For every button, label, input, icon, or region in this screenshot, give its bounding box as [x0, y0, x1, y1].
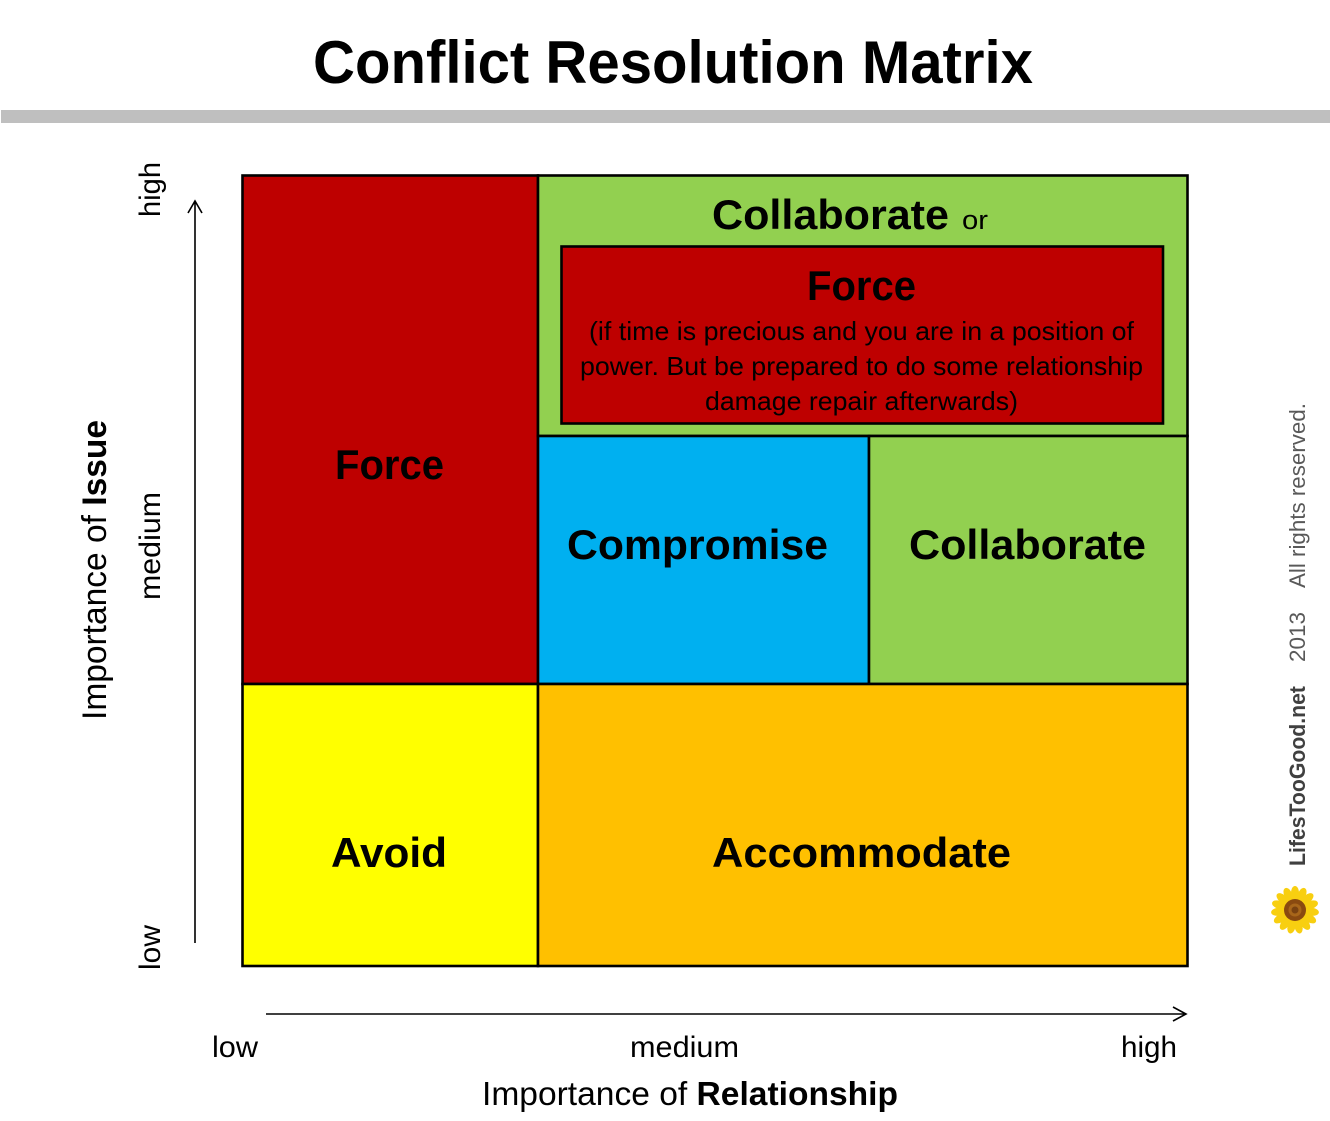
y axis tick: high: high	[134, 162, 167, 217]
inner panel: force with condition	[562, 246, 1163, 424]
y axis tick: low: low	[134, 925, 167, 970]
title rule	[1, 110, 1330, 123]
cell: collaborate or force	[538, 176, 1188, 436]
inner panel: force with condition: damage repair afterwards)	[705, 386, 1018, 416]
inner panel: force with condition: power. But be prepared to do some relationship	[580, 351, 1143, 381]
cell: collaborate or force: Collaborate	[712, 191, 949, 238]
x axis title: Importance of Relationship	[482, 1075, 898, 1112]
inner panel: force with condition: Force	[807, 262, 916, 309]
cell: compromise	[538, 436, 869, 684]
inner panel: force with condition: (if time is precious and you are in a position of	[589, 316, 1135, 346]
arrow: issue axis	[188, 201, 202, 943]
cell: avoid	[242, 684, 538, 966]
conflict resolution matrix	[242, 176, 1188, 966]
title: Conflict Resolution Matrix	[313, 29, 1033, 96]
cell: force (low relationship, medium to high issue)	[242, 176, 538, 684]
y axis tick: medium: medium	[134, 492, 167, 600]
cell: collaborate or force: or	[962, 205, 988, 235]
credit: year: 2013	[1285, 612, 1310, 662]
x axis tick: low: low	[212, 1031, 258, 1064]
x axis tick: medium: medium	[630, 1031, 739, 1064]
credit: website: LifesTooGood.net	[1285, 685, 1310, 866]
cell: force (low relationship, medium to high issue): Force	[335, 441, 444, 488]
cell: collaborate: Collaborate	[909, 521, 1146, 568]
cell: compromise: Compromise	[567, 521, 828, 568]
cell: collaborate	[869, 436, 1188, 684]
cell: avoid: Avoid	[331, 829, 447, 876]
x axis tick: high: high	[1121, 1031, 1177, 1064]
cell: accommodate: Accommodate	[712, 829, 1011, 876]
arrow: relationship axis	[266, 1007, 1186, 1021]
y axis title: Importance of Issue	[76, 420, 114, 720]
credit: rights: All rights reserved.	[1285, 403, 1310, 588]
cell: accommodate	[538, 684, 1188, 966]
icon: sunflower	[1271, 886, 1319, 934]
